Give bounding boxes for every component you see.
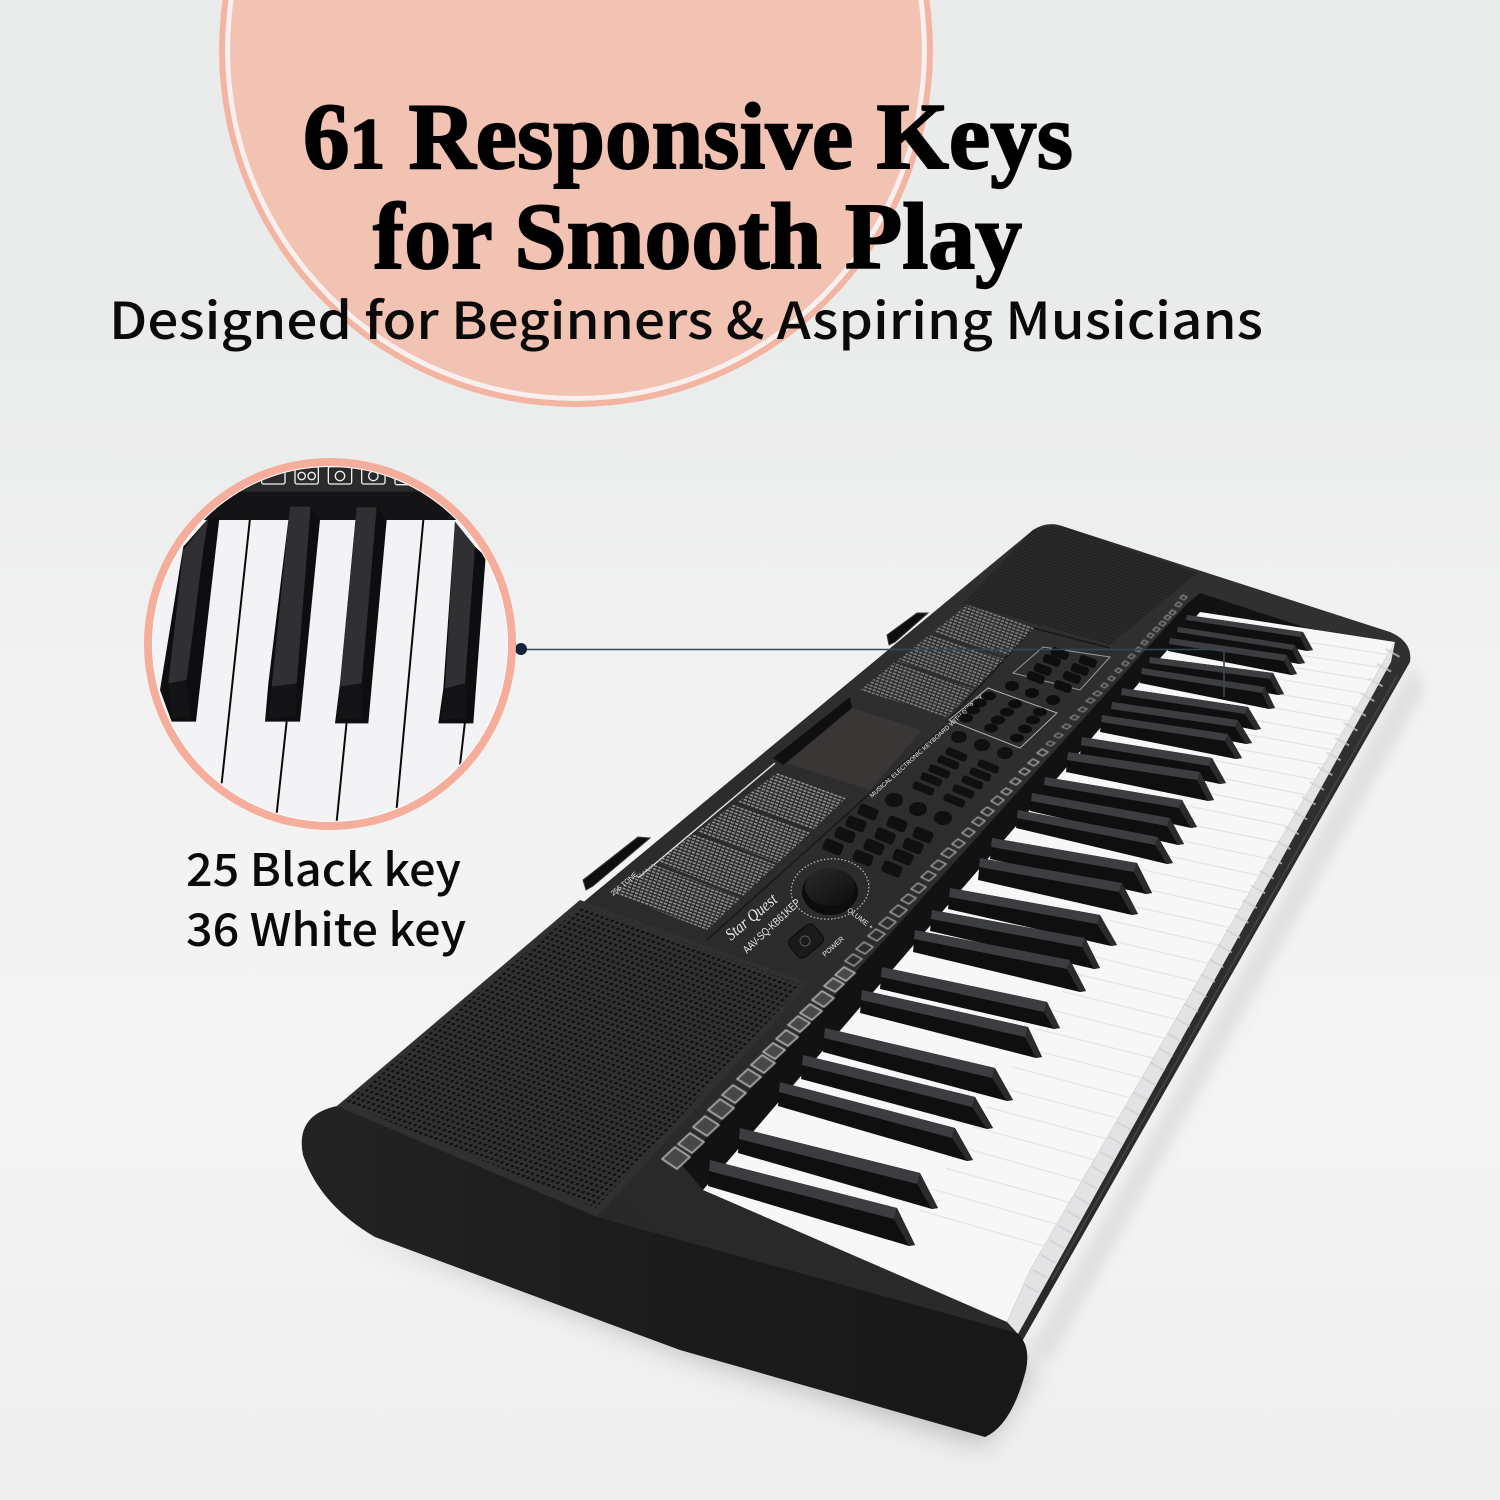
near speaker grille xyxy=(337,900,810,1217)
ground shadow xyxy=(350,1225,1035,1445)
right side shadow xyxy=(1030,665,1425,1360)
keyboard illustration xyxy=(302,524,1425,1445)
inset black key 1 xyxy=(160,518,219,722)
inset content xyxy=(153,467,507,821)
keybed recess xyxy=(682,593,1395,1270)
inset: key close-up xyxy=(140,450,530,840)
inset black key 2 xyxy=(265,507,320,722)
number pad xyxy=(949,681,1060,748)
function buttons xyxy=(821,731,1013,878)
icon strip above keys xyxy=(662,595,1187,1169)
music stand clips xyxy=(583,613,928,890)
brand and model text: AAV-SQ-KB61KEP xyxy=(741,897,803,956)
brand and model text: MUSICAL ELECTRONIC KEYBOARD WITH DISPLAY xyxy=(869,694,985,799)
control panel divider lines xyxy=(707,628,1110,940)
title: 61 Responsive Keys xyxy=(303,85,1073,189)
display screen xyxy=(773,697,922,790)
black keys xyxy=(708,615,1313,1246)
subtitle: Designed for Beginners & Aspiring Musicians xyxy=(109,280,1263,354)
brand and model text: Star Quest xyxy=(721,889,782,944)
connector line from inset to keys xyxy=(515,643,1224,697)
far speaker grille xyxy=(963,526,1197,645)
pink circle behind heading xyxy=(219,0,933,407)
title xyxy=(303,85,1073,289)
inset black key 4 xyxy=(438,522,486,723)
volume knob xyxy=(787,854,873,924)
brand and model text: 256 TONE xyxy=(610,871,640,898)
key count labels: 25 Black key xyxy=(186,834,461,899)
side rim highlight xyxy=(1052,676,1397,1280)
white rule above tone list xyxy=(638,763,775,878)
power button xyxy=(786,922,826,960)
keyboard body xyxy=(337,524,1410,1352)
key count labels xyxy=(186,834,466,959)
front end cap xyxy=(302,1106,1027,1437)
white keys xyxy=(703,612,1395,1334)
brand and model text: POWER xyxy=(822,936,846,958)
tone list text blocks xyxy=(613,605,1035,930)
brand and model text: VOLUME + xyxy=(842,904,874,931)
title: for Smooth Play xyxy=(373,185,1022,289)
brand and model text xyxy=(610,694,985,958)
inset black key 3 xyxy=(335,507,387,723)
key count labels: 36 White key xyxy=(186,894,466,959)
upper function buttons xyxy=(1013,646,1110,694)
